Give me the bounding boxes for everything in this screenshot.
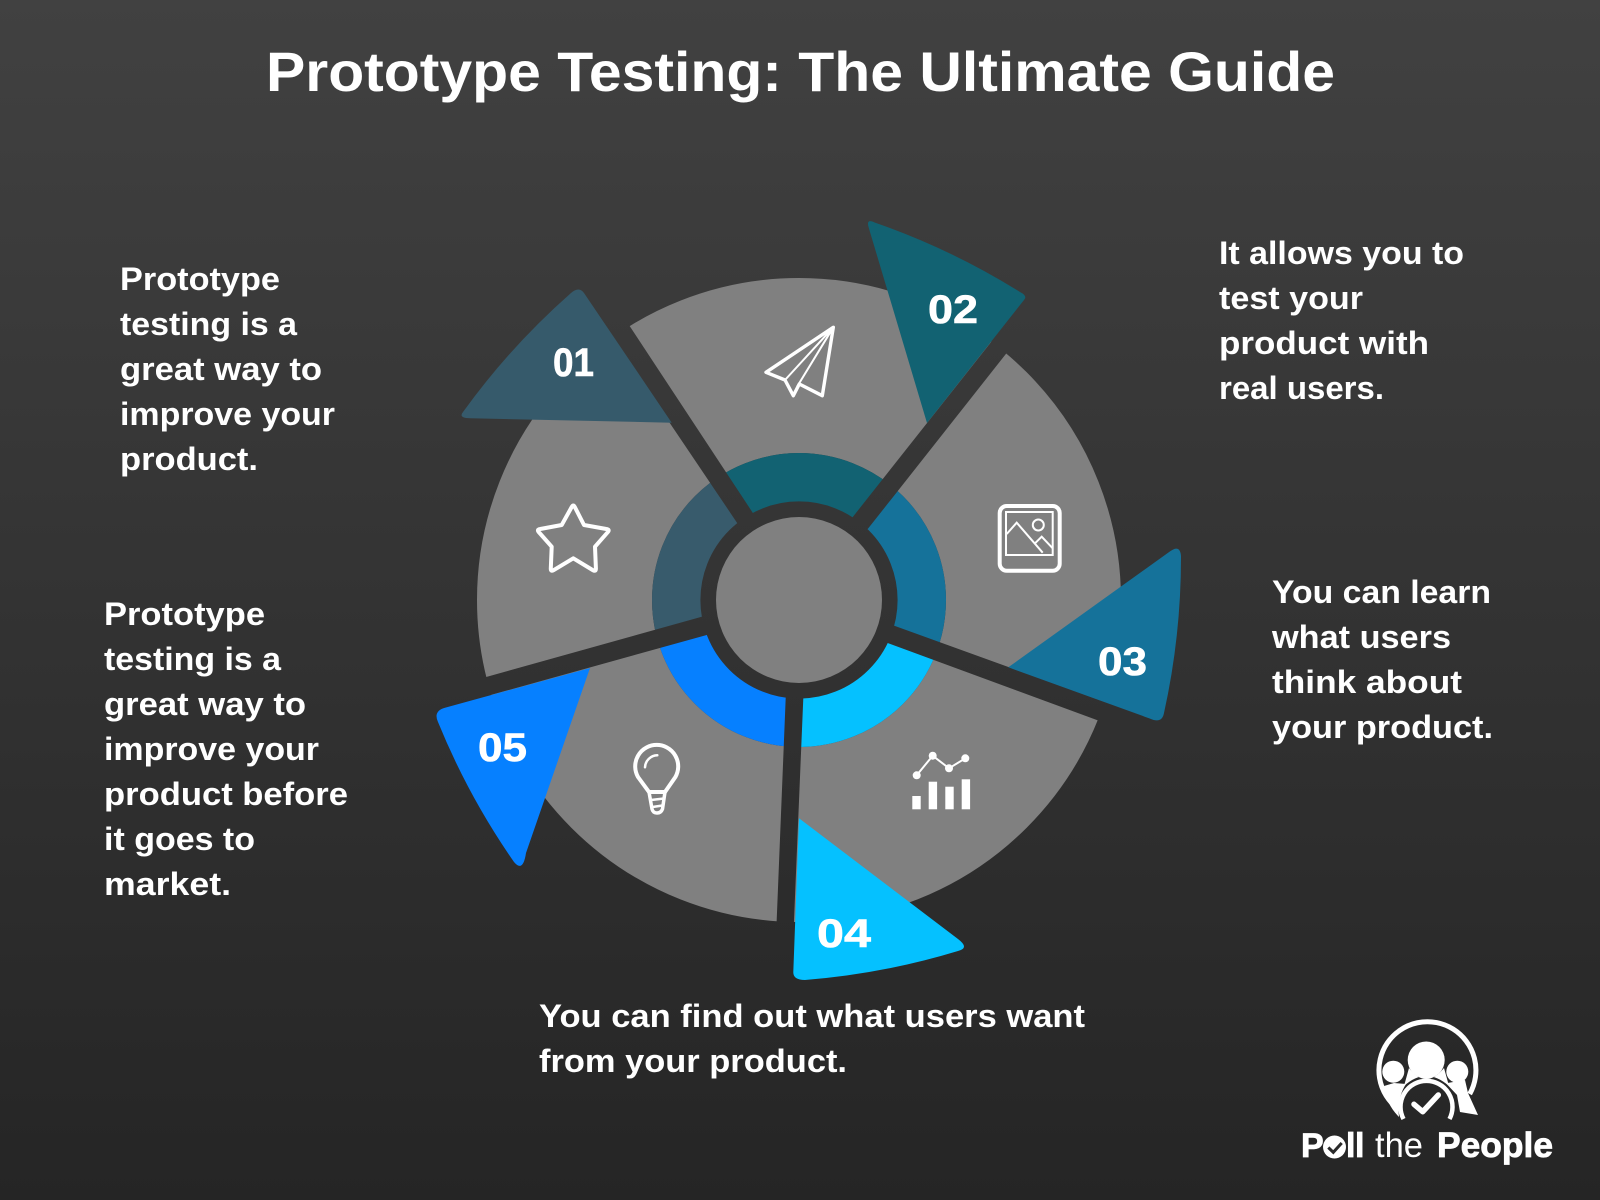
number 03: 03 [1098,640,1147,684]
flag 04 [793,818,964,980]
text block 05: market. [104,866,231,902]
text block 05: it goes to [104,821,255,857]
icon: paper plane [766,327,833,396]
text block 04: from your product. [539,1043,847,1079]
text block 03: think about [1272,664,1462,700]
center circle [716,517,882,683]
segment: chart [794,643,1098,922]
text block 05: great way to [104,686,306,722]
segment: paper plane [630,278,992,518]
logo wordmark: Poll [1301,1127,1364,1165]
logo wordmark [1301,1126,1553,1165]
flag 02 [868,221,1025,423]
text block 05: Prototype [104,596,265,632]
segment: bulb [491,635,786,922]
text block 01 [120,261,335,477]
text block 01: Prototype [120,261,280,297]
flag 03 [1008,549,1181,720]
segment: image [868,354,1121,667]
text block 04 [539,998,1085,1079]
text block 02: product with [1219,325,1429,361]
text block 03 [1271,574,1493,745]
number 01: 01 [553,341,594,385]
text block 05: improve your [104,731,319,767]
number 05: 05 [478,726,527,770]
icon: image [1000,506,1060,571]
text block 03: You can learn [1272,574,1491,610]
flag 05 [437,668,590,866]
text block 02 [1219,235,1464,406]
radial diagram [437,221,1181,980]
text block 02: real users. [1219,370,1384,406]
text block 01: testing is a [120,306,297,342]
text block 02: It allows you to [1219,235,1464,271]
text block 03: what users [1271,619,1451,655]
text block 05: testing is a [104,641,281,677]
text block 01: great way to [120,351,322,387]
text block 01: product. [120,441,258,477]
segment: star [477,420,738,677]
text block 03: your product. [1272,709,1493,745]
icon: chart [912,752,970,809]
icon: star [538,506,609,571]
logo wordmark: People [1437,1126,1553,1165]
text block 02: test your [1219,280,1363,316]
logo: Poll the People [1301,1022,1553,1165]
logo mark [1379,1022,1478,1119]
text block 05 [104,596,348,902]
title: Prototype Testing: The Ultimate Guide [266,40,1335,103]
flag 01 [462,290,672,423]
icon: light bulb [635,745,678,813]
number 04: 04 [817,912,872,956]
text block 01: improve your [120,396,335,432]
logo wordmark: the [1375,1126,1423,1165]
text block 05: product before [104,776,348,812]
number 02: 02 [928,288,978,332]
text block 04: You can find out what users want [539,998,1085,1034]
